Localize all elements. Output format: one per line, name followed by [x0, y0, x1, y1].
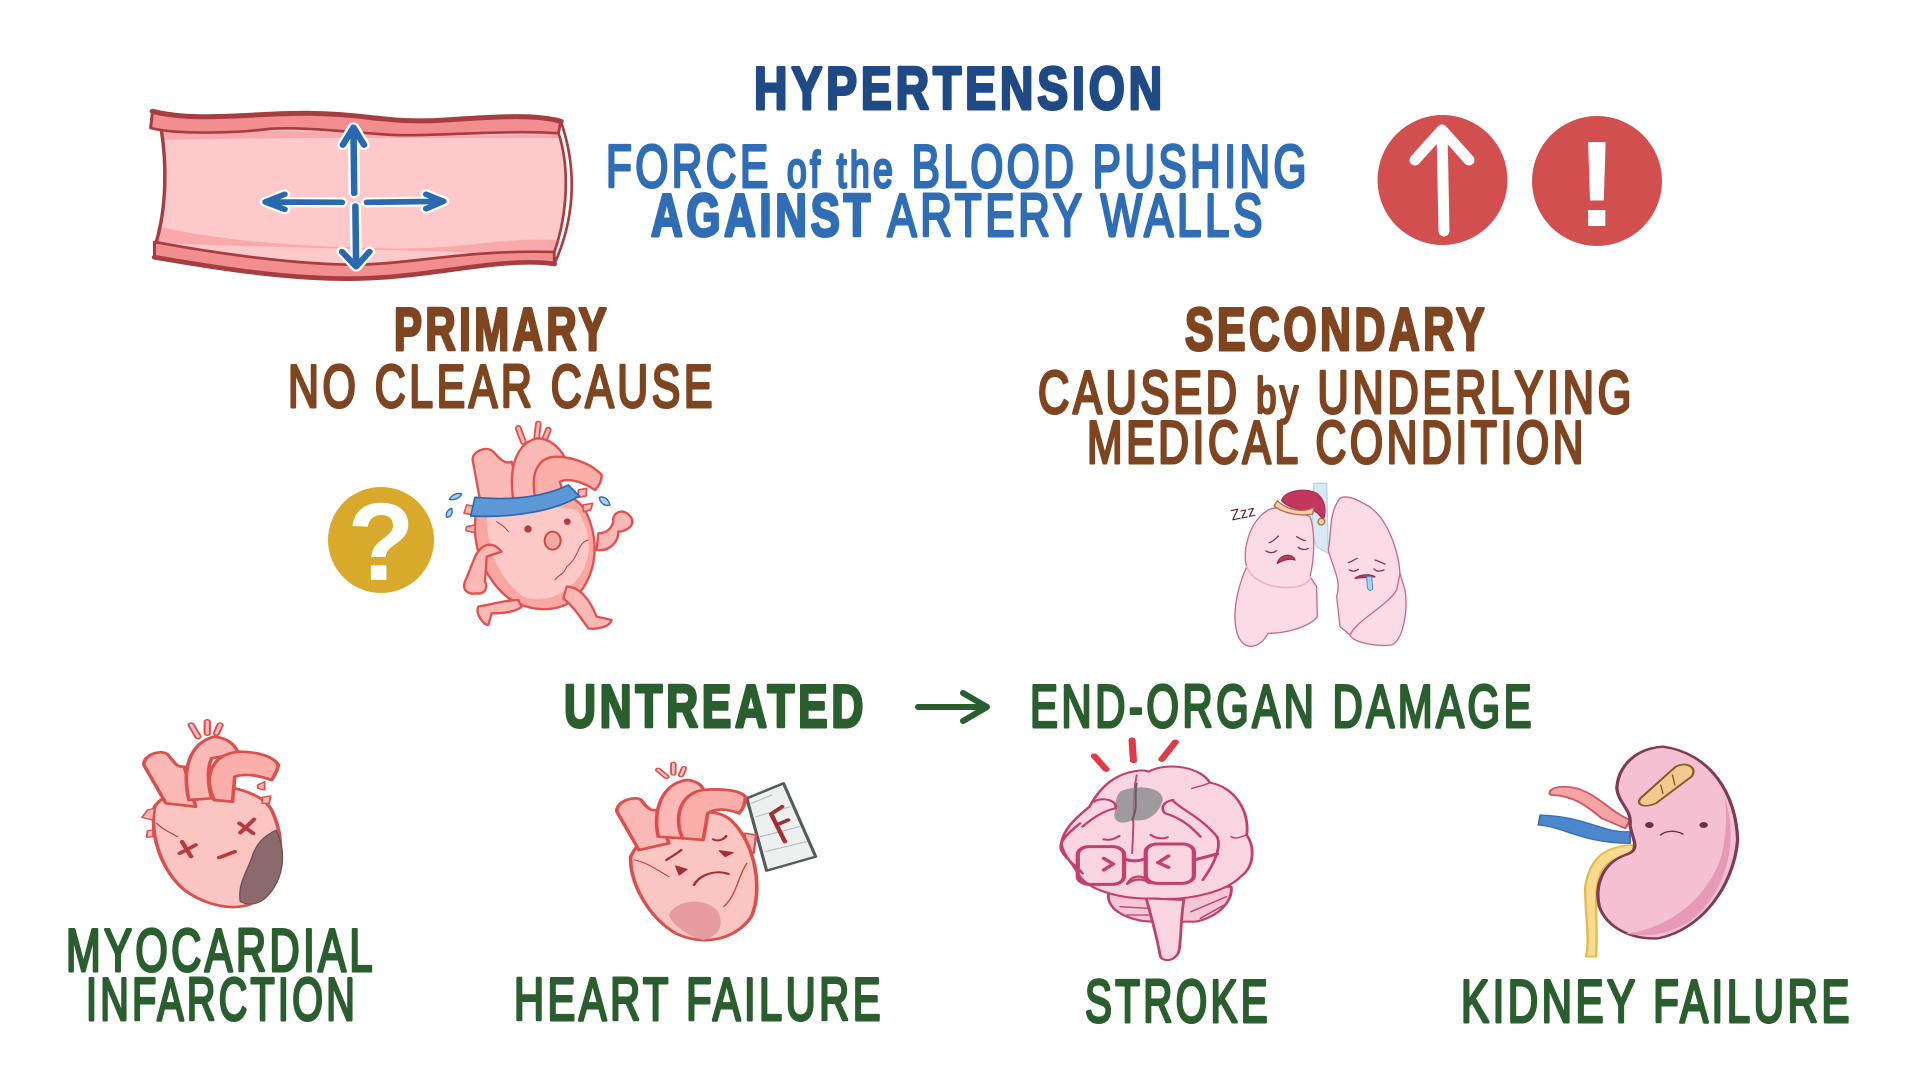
snore text: Zzz: [1229, 503, 1257, 525]
label: myocardial infarction: INFARCTION: [86, 966, 358, 1033]
icon: increase arrow in red circle: [1378, 115, 1508, 245]
definition text: AGAINST ARTERY WALLS: [651, 182, 1266, 249]
glasses: [1078, 844, 1217, 884]
arrow: leads to: [918, 693, 987, 721]
label: myocardial infarction: [66, 917, 376, 1033]
ischemic area: [1114, 787, 1163, 823]
heading: secondary: SECONDARY: [1185, 296, 1488, 363]
graded paper: [747, 783, 816, 871]
heading: untreated: UNTREATED: [564, 673, 867, 740]
label: myocardial infarction: MYOCARDIAL: [66, 917, 376, 984]
infarcted heart: [142, 722, 283, 907]
icon: exclamation in red circle: [1532, 116, 1662, 252]
sweat drops: [446, 493, 610, 517]
definition text: FORCE of the BLOOD PUSHING: [606, 133, 1310, 200]
text: caused by underlying medical condition: MEDICAL CONDITION: [1087, 409, 1587, 476]
failing heart holding F paper: [617, 764, 816, 940]
sleeping lungs with nightcap: [1229, 483, 1406, 646]
faces: [1266, 536, 1385, 571]
headband: [471, 485, 579, 516]
artery illustration with outward pressure arrows: [151, 111, 572, 279]
stroke brain with glasses: [1061, 740, 1252, 960]
title: HYPERTENSION: [754, 55, 1166, 122]
icon: question mark in gold circle: ?: [347, 481, 415, 604]
kidney with bandage: [1538, 747, 1738, 957]
definition text: [606, 133, 1310, 249]
label: heart failure: HEART FAILURE: [514, 966, 884, 1033]
pain ticks: [1094, 740, 1175, 769]
bandage: [1639, 765, 1693, 806]
arms and legs: [464, 545, 502, 594]
pressure arrows: [265, 127, 443, 267]
hands on head: [1061, 799, 1218, 880]
heading: end-organ damage: END-ORGAN DAMAGE: [1030, 673, 1535, 740]
icon: question mark in gold circle: [328, 481, 434, 604]
text: no clear cause: NO CLEAR CAUSE: [288, 353, 716, 420]
label: stroke: STROKE: [1085, 968, 1271, 1035]
text: caused by underlying medical condition: CAUSED by UNDERLYING: [1038, 359, 1635, 426]
heading: primary: PRIMARY: [394, 296, 610, 363]
nightcap: [1282, 490, 1325, 520]
icon: exclamation in red circle: !: [1577, 116, 1617, 252]
running heart with headband: [446, 424, 632, 629]
text: caused by underlying medical condition: [1038, 359, 1635, 476]
